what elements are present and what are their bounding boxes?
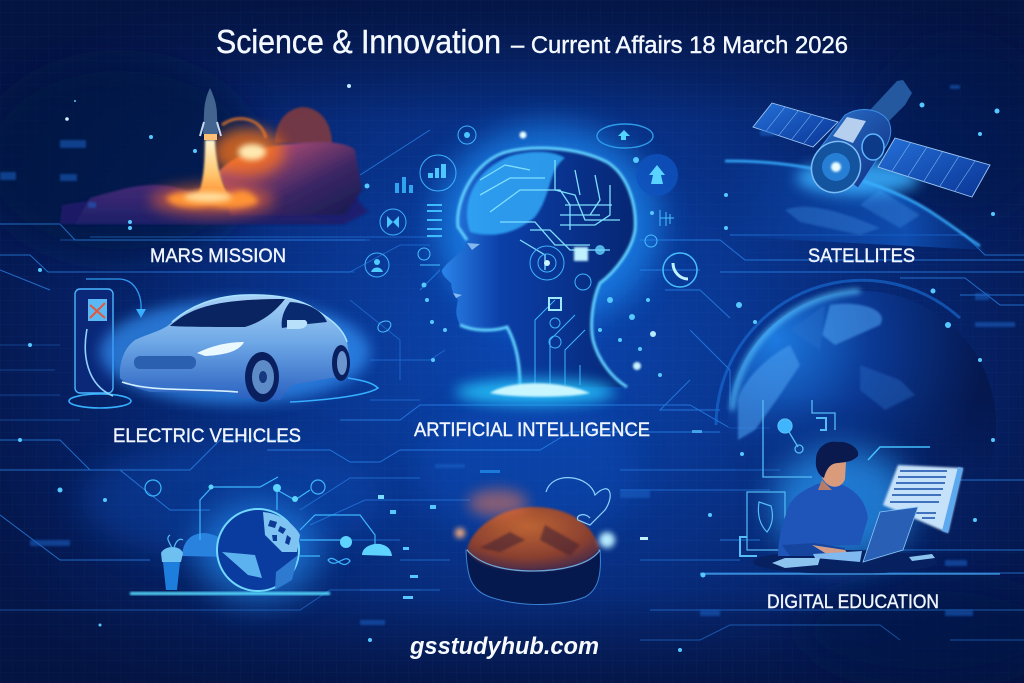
neck circuit [530, 246, 591, 385]
bright nodes [208, 484, 392, 556]
panel: bottom mars dome [455, 478, 615, 604]
windshield [170, 299, 285, 327]
frame: top diagram [763, 400, 835, 477]
panel: mars mission scene [60, 88, 368, 224]
orange explosion glow [212, 119, 284, 176]
solar panel right [878, 138, 990, 197]
laptop screen [863, 507, 918, 562]
icon: bar chart [420, 155, 456, 191]
mouse pad [909, 554, 935, 561]
icon: top right oval [597, 124, 653, 148]
sleeve arm [782, 543, 845, 556]
icon: hourglass badge [380, 209, 406, 235]
ground ring [69, 378, 378, 408]
label: satellites: SATELLITES [808, 246, 915, 267]
head silhouette [442, 148, 635, 387]
lens dish [802, 132, 870, 202]
torso [778, 482, 868, 556]
glowing base [455, 379, 615, 405]
charging station [75, 289, 113, 396]
panel: bottom left globe [130, 477, 392, 602]
platform base [466, 550, 600, 604]
mars landscape base [60, 185, 368, 224]
cable plug [136, 309, 146, 318]
panel: digital education [700, 400, 1000, 574]
charging cable [86, 279, 141, 310]
icon: people node [636, 154, 678, 196]
panel: globe [714, 278, 996, 470]
surface texture [480, 525, 580, 556]
hair [816, 442, 858, 478]
circuit lines background [0, 130, 1024, 640]
title: Science & Innovation [216, 23, 501, 60]
icon: small bars [397, 177, 411, 193]
desk line [700, 573, 1000, 575]
connected nodes [145, 477, 375, 565]
mirror [287, 320, 307, 329]
potted plant [161, 535, 183, 590]
panel: satellite scene [720, 80, 990, 250]
neck [818, 480, 832, 490]
earth horizon [720, 160, 985, 250]
connector line [868, 447, 930, 460]
head outline glow [458, 148, 635, 387]
silver plate [833, 117, 866, 143]
grille [134, 356, 196, 369]
label: electric vehicles: ELECTRIC VEHICLES [113, 426, 301, 447]
rear wheel [332, 345, 350, 381]
chips [544, 245, 605, 310]
front wheel [245, 352, 279, 402]
panel: electric vehicle [69, 279, 378, 408]
website footer: gsstudyhub.com [409, 633, 599, 660]
panel: artificial intelligence head [436, 125, 660, 405]
icon: top node [458, 126, 476, 144]
data dots and small bars [18, 84, 1000, 652]
eye and lips [453, 243, 480, 298]
subtitle: – Current Affairs 18 March 2026 [511, 32, 848, 59]
bumper [122, 382, 238, 392]
book [772, 558, 820, 568]
sphere [217, 509, 300, 591]
satellite neck [870, 80, 912, 122]
frame: shield panel [740, 492, 785, 556]
table [753, 550, 937, 574]
label: digital education: DIGITAL EDUCATION [767, 592, 939, 613]
exhaust flame and fire cloud [150, 140, 274, 216]
satellite body [815, 110, 891, 188]
rocket [200, 88, 221, 140]
solar panel left [753, 103, 838, 147]
emblem [862, 134, 884, 160]
document [883, 465, 963, 533]
glow blue [599, 532, 615, 548]
floor beam [130, 592, 330, 595]
face [822, 462, 846, 487]
icon: person badge [365, 253, 389, 277]
cloud [182, 533, 232, 557]
rim [467, 550, 600, 571]
icon: left nodes [378, 210, 674, 332]
headlight [197, 342, 244, 356]
side windows [282, 302, 327, 328]
keyboard [813, 551, 862, 562]
label: artificial intelligence: ARTIFICIAL INTELLIGENCE [414, 420, 650, 441]
label: mars mission: MARS MISSION [150, 246, 286, 267]
brain circuit traces [480, 160, 620, 270]
hand [812, 545, 850, 556]
icon: list lines [427, 205, 442, 236]
loops [546, 478, 610, 525]
distant planet [275, 107, 332, 145]
glow orange [455, 489, 528, 538]
car glow [100, 300, 370, 404]
brain left bright [467, 152, 565, 235]
car body [120, 295, 349, 400]
icon cluster around head [365, 124, 697, 332]
car outline [172, 295, 347, 342]
icon: phone ring [663, 253, 697, 287]
planet horizon [218, 142, 362, 215]
dome [467, 507, 600, 571]
soft data blocks [0, 85, 1015, 625]
